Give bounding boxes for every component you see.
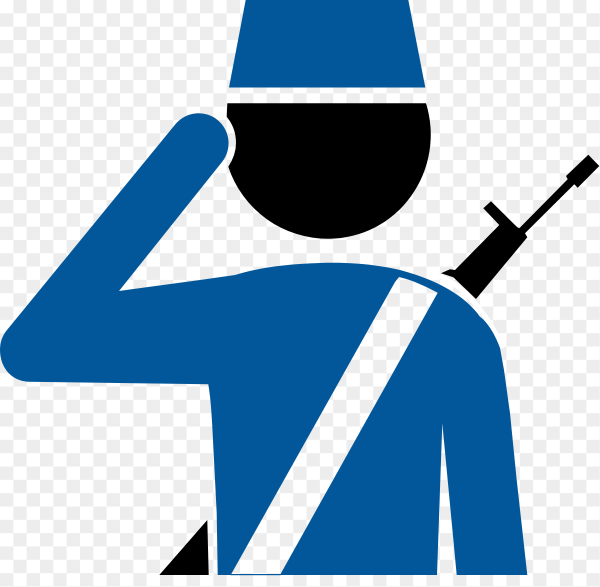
icon: hat (229, 0, 425, 88)
icon: rifle slung behind shoulder (441, 155, 599, 299)
thin base line under the strap (231, 574, 281, 575)
white halo between shoulder and rifle (440, 276, 503, 348)
icon: black corner triangle (159, 520, 209, 575)
icon: head (227, 103, 431, 239)
icon: body with raised saluting arm (0, 113, 527, 575)
